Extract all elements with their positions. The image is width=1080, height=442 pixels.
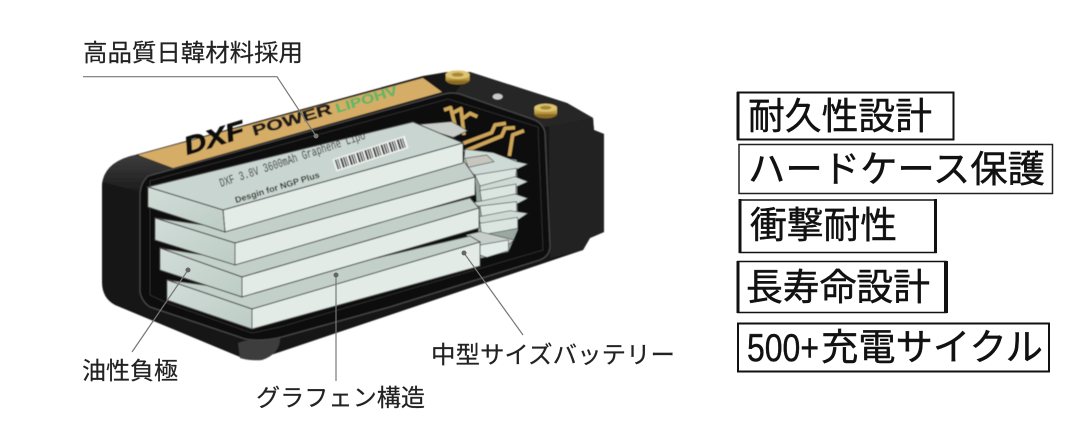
battery case xyxy=(102,72,604,360)
leader dot: material xyxy=(314,134,318,138)
feature box: impact resistance: 衝撃耐性 xyxy=(750,205,897,246)
leader dot: graphene xyxy=(334,272,338,278)
label: anode: 油性負極 xyxy=(82,358,178,385)
feature box: 500+ charge cycles: 充電サイクル xyxy=(821,327,1043,368)
right side tabs and connectors xyxy=(413,70,557,258)
gold top label strip xyxy=(138,78,442,168)
chemistry tag: LIPOHV xyxy=(333,83,399,116)
barcode xyxy=(332,136,409,172)
silver screw xyxy=(493,94,503,100)
cell spec text: DXF 3.8V 3600mAh Graphene Lipo xyxy=(218,129,367,191)
cell 2 xyxy=(155,160,475,265)
cell 3 xyxy=(160,198,479,297)
feature box: hard case: ハードケース保護 xyxy=(748,149,1045,190)
feature box: 500+ charge cycles: 500+ xyxy=(747,327,819,370)
leader dot: anode xyxy=(186,268,190,272)
gold bolt right xyxy=(534,104,557,118)
battery cavity xyxy=(140,93,550,340)
feature box: durable design: 耐久性設計 xyxy=(748,96,932,137)
battery illustration xyxy=(102,70,604,360)
leader line: graphene xyxy=(335,275,337,381)
feature box: long life: 長寿命設計 xyxy=(746,267,930,308)
cell 1 with printed label xyxy=(148,122,463,232)
cell 1 body xyxy=(148,122,463,232)
leader line: anode xyxy=(132,270,188,352)
leader line: mid-size battery xyxy=(464,253,523,335)
cell design text: Desgin for NGP Plus xyxy=(234,170,321,205)
brand logo: DXF xyxy=(181,116,249,161)
feature box: 500+ charge cycles xyxy=(738,324,1049,372)
leader line: material xyxy=(83,77,316,136)
gold bolt left xyxy=(446,70,470,85)
tab stack backing xyxy=(463,150,518,258)
label: graphene: グラフェン構造 xyxy=(256,385,425,412)
label: material: 高品質日韓材料採用 xyxy=(83,40,303,67)
leader dot: mid-size battery xyxy=(462,250,466,256)
feature box: impact resistance xyxy=(740,199,936,253)
gold connectors xyxy=(444,108,524,156)
cell 4 xyxy=(167,236,480,329)
brand name: POWER xyxy=(250,101,334,140)
label: mid-size battery: 中型サイズバッテリー xyxy=(431,342,675,369)
cell tabs xyxy=(413,122,528,257)
